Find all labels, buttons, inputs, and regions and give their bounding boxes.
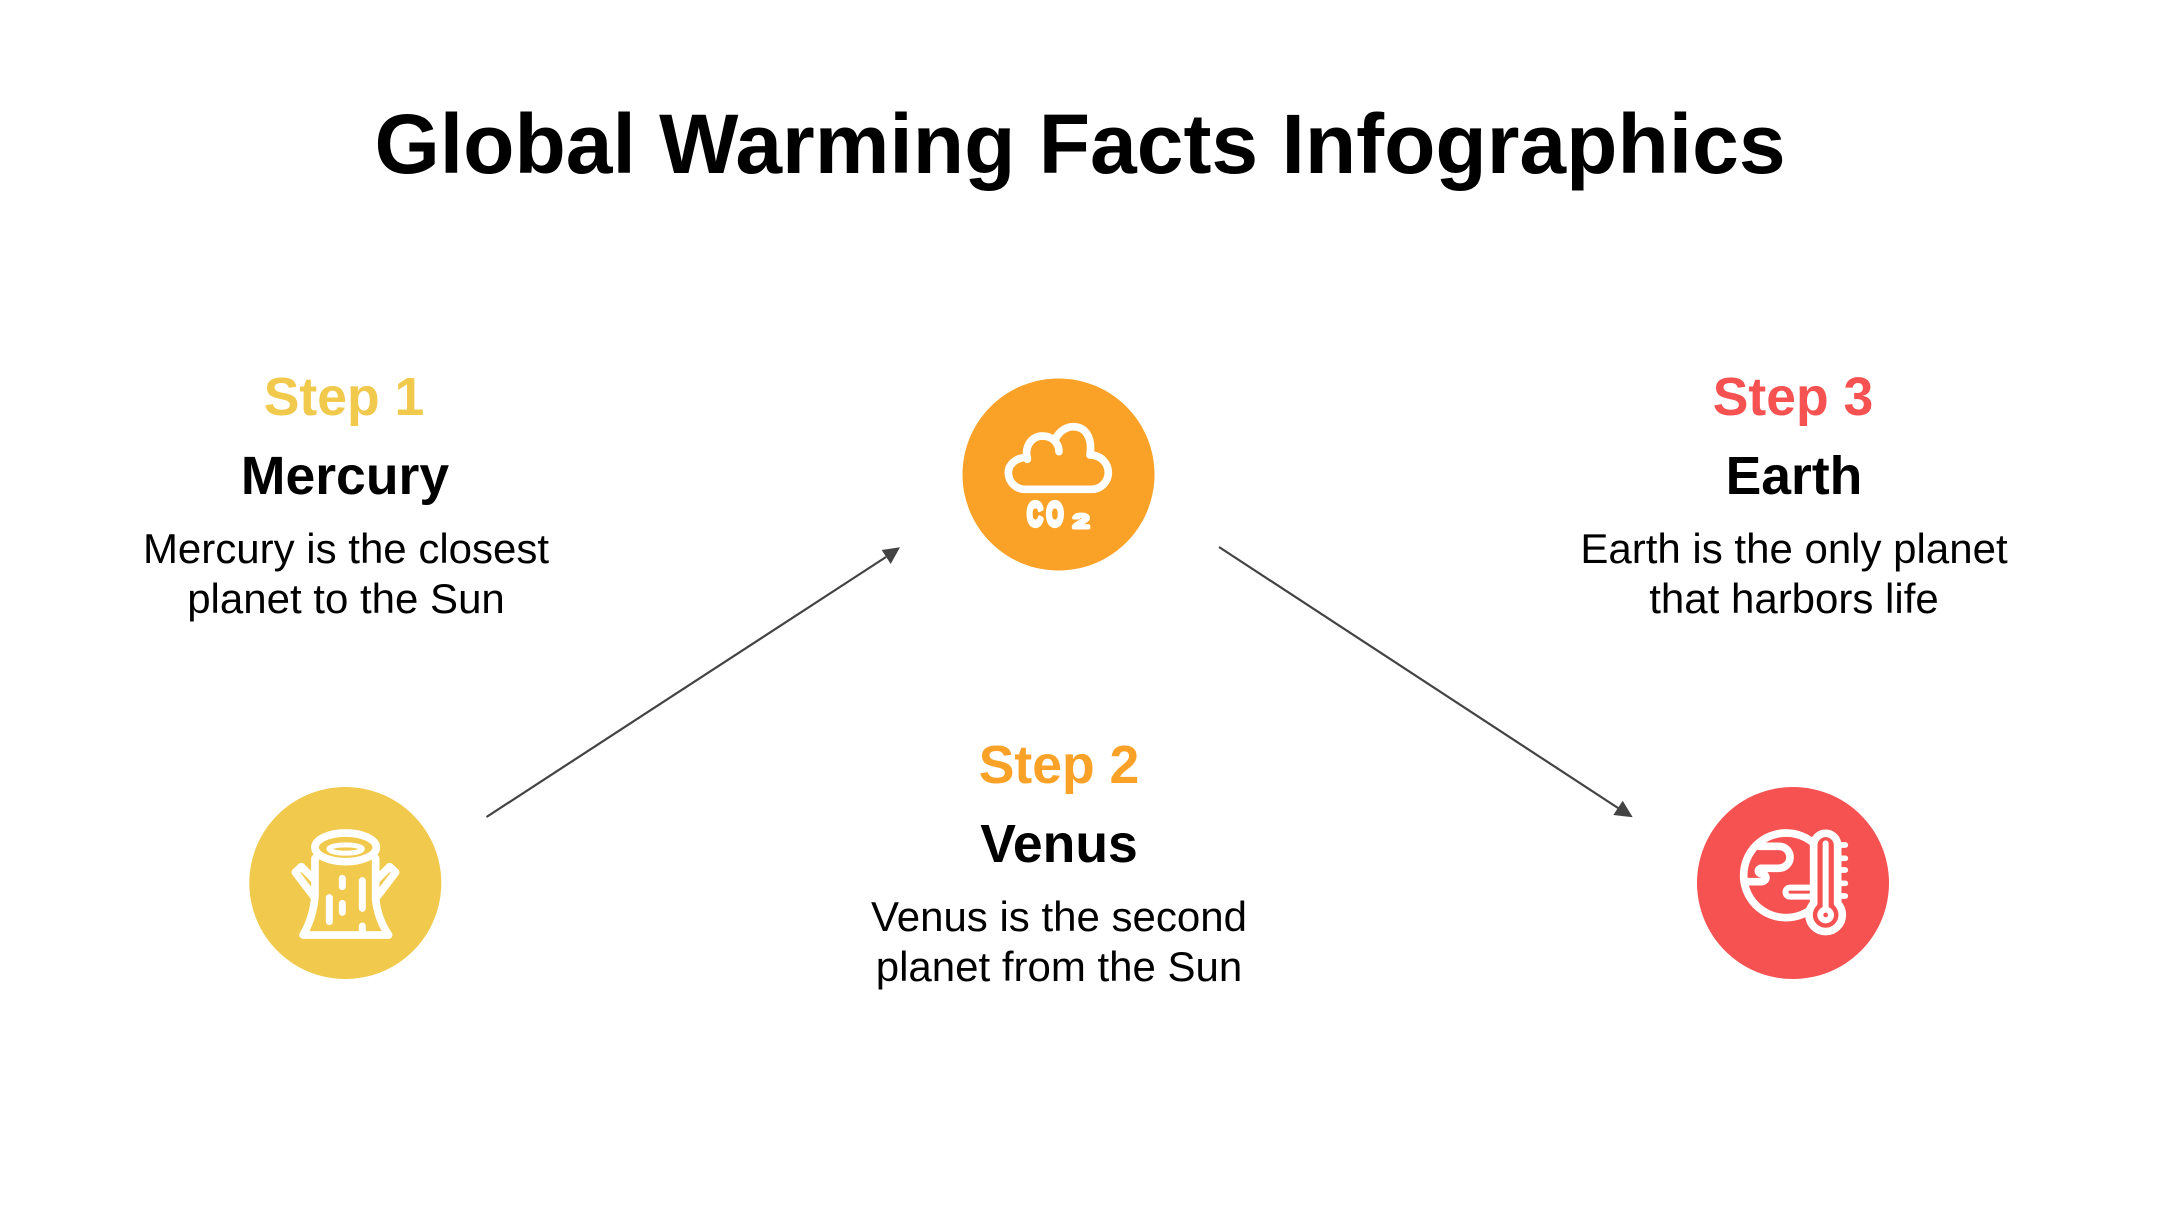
- step 1 description: [143, 525, 549, 622]
- step 3 description: that harbors life: [1649, 575, 1939, 622]
- step 2 description: Venus is the second: [871, 893, 1247, 940]
- step 1 description: planet to the Sun: [187, 575, 505, 622]
- text block: step 1: [143, 368, 549, 622]
- step 2 heading: Venus: [980, 814, 1138, 874]
- step 3 description: Earth is the only planet: [1580, 525, 2008, 572]
- icon: CO2 cloud: 2: [1073, 510, 1089, 533]
- text block: step 3: [1580, 368, 2008, 622]
- step 2 description: [871, 893, 1247, 990]
- icon: CO2 cloud: [962, 378, 1154, 570]
- step 3 label: Step 3: [1713, 368, 1873, 427]
- step 2 description: planet from the Sun: [876, 943, 1242, 990]
- arrow: step 1 to step 2: [486, 547, 900, 817]
- icon: earth and thermometer: [1697, 787, 1889, 979]
- icon: tree stump: [249, 787, 441, 979]
- step 1 description: Mercury is the closest: [143, 525, 549, 572]
- step 3 description: [1580, 525, 2008, 622]
- step 1 heading: Mercury: [241, 446, 449, 506]
- arrow: step 2 to step 3: [1219, 547, 1633, 817]
- CO2 lettering: CO: [1027, 496, 1067, 533]
- step 2 label: Step 2: [979, 736, 1139, 795]
- step 3 heading: Earth: [1726, 446, 1862, 506]
- title: Global Warming Facts Infographics: [374, 97, 1786, 191]
- text block: step 2: [871, 736, 1247, 990]
- step 1 label: Step 1: [264, 368, 424, 427]
